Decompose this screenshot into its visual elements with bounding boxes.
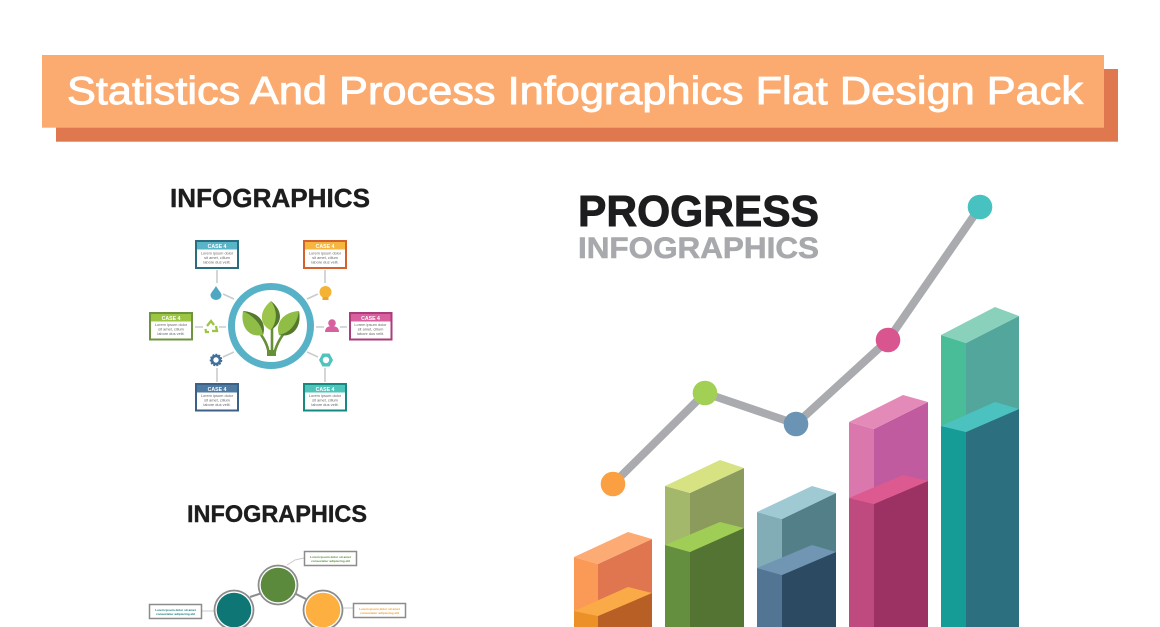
label box: right: consectetur adipiscing elit: [360, 611, 399, 615]
point: orange: [601, 472, 625, 496]
radial infographic: [150, 241, 392, 410]
case box: bottom right: labore dus velit.: [311, 402, 339, 407]
label box: right: Lorem ipsum dolor sit amet: [359, 607, 400, 611]
case box: right: labore dus velit.: [357, 331, 384, 336]
point: pink: [876, 328, 900, 352]
case box: bottom left: sit amet, cillum: [204, 398, 230, 402]
case box: bottom right: sit amet, cillum: [312, 398, 338, 402]
case box: bottom right: [304, 384, 346, 410]
heading: first infographic: INFOGRAPHICS: [170, 183, 370, 213]
label box: left: [150, 604, 202, 618]
bar 1: orange: [574, 532, 652, 627]
label box: top: [304, 552, 356, 566]
icon: person: [325, 319, 339, 332]
case box: right: sit amet, cillum: [358, 326, 383, 332]
case box: bottom left: labore dus velit.: [203, 402, 231, 407]
point: teal: [968, 195, 992, 219]
case box: left: sit amet, cillum: [158, 326, 184, 332]
case box: right: [350, 313, 392, 340]
case box: top left: Lorem ipsum dolor: [201, 250, 234, 256]
label box: left: Lorem ipsum dolor sit amet: [155, 608, 196, 612]
case box: top right: CASE 4: [316, 244, 334, 250]
node: orange: [304, 590, 342, 627]
case box: bottom left: Lorem ipsum dolor: [201, 393, 234, 398]
case box: top left: sit amet, cillum: [204, 255, 230, 260]
label box: top: Lorem ipsum dolor sit amet: [310, 555, 351, 559]
label box: left: consectetur adipiscing elit: [156, 612, 195, 616]
case box: top right: labore dus velit.: [311, 260, 339, 264]
connectors: [250, 593, 306, 599]
icon: light bulb: [320, 286, 332, 300]
case box: left: CASE 4: [162, 316, 180, 322]
case box: top left: [196, 241, 238, 268]
case box: right: CASE 4: [361, 316, 380, 322]
progress line: [601, 195, 992, 496]
point: green: [693, 381, 717, 405]
case box: left: Lorem ipsum dolor: [155, 322, 188, 327]
label box: top: consectetur adipiscing elit: [311, 559, 350, 563]
icon: water drop: [210, 286, 222, 300]
point: blue: [784, 412, 808, 436]
subheading: infographics: INFOGRAPHICS: [578, 232, 819, 265]
bar 3: blue: [757, 486, 836, 627]
circle process infographic: [150, 552, 406, 627]
case box: bottom left: [196, 384, 238, 410]
case box: top left: CASE 4: [208, 244, 226, 250]
icon: recycle: [206, 321, 217, 332]
case box: top right: sit amet, cillum: [312, 255, 338, 260]
case box: top left: labore dus velit.: [203, 260, 231, 264]
bar 2: green: [665, 460, 744, 627]
3D bar chart: [574, 307, 1019, 627]
case box: bottom right: Lorem ipsum dolor: [309, 393, 342, 398]
connector lines: [195, 270, 347, 382]
label box: right: [354, 604, 406, 618]
heading: second infographic: INFOGRAPHICS: [187, 501, 367, 528]
node: green: [258, 566, 298, 604]
case box: right: Lorem ipsum dolor: [354, 322, 387, 327]
case box: left: labore dus velit.: [157, 331, 185, 336]
heading: progress: PROGRESS: [578, 187, 819, 236]
banner title: Statistics And Process Infographics Flat Design Pack: [67, 70, 1084, 113]
case box: bottom right: CASE 4: [316, 387, 334, 393]
bar 4: pink: [849, 395, 928, 627]
bar 5: teal: [941, 307, 1019, 627]
case box: top right: Lorem ipsum dolor: [309, 250, 342, 256]
center ring: [232, 286, 310, 366]
icon: plant: [242, 301, 300, 356]
node: teal: [214, 590, 254, 627]
case box: top right: [304, 241, 346, 268]
icon: hexagon nut: [319, 354, 333, 366]
header banner: [42, 55, 1118, 142]
case box: bottom left: CASE 4: [208, 387, 226, 393]
case box: left: [150, 313, 192, 340]
icon: gear: [210, 354, 222, 366]
